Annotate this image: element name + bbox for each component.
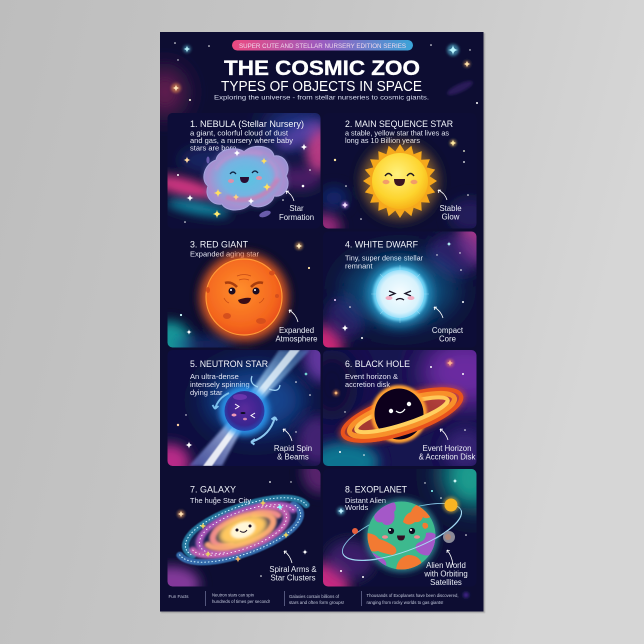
footer: fun facts: Galaxies contain billions of bbox=[289, 594, 340, 599]
callout: with Orbiting bbox=[423, 570, 468, 578]
heading: 4. WHITE DWARF bbox=[345, 240, 418, 250]
description: Worlds bbox=[345, 503, 368, 512]
description: intensely spinning bbox=[190, 380, 250, 389]
panel: red giant bbox=[168, 240, 318, 350]
arrow bbox=[447, 550, 453, 565]
icon: smiling sun bbox=[362, 143, 438, 219]
beams bbox=[189, 350, 310, 466]
callout: Stable bbox=[439, 204, 462, 213]
footer: fun facts: Neutron stars can spin bbox=[212, 592, 254, 598]
arrow bbox=[440, 429, 448, 440]
description: Event horizon & bbox=[345, 372, 398, 381]
description: Tiny, super dense stellar bbox=[345, 254, 423, 262]
description: dying star bbox=[190, 388, 223, 397]
title: THE COSMIC ZOO bbox=[224, 57, 420, 80]
icon: neutron star bbox=[212, 376, 280, 444]
footer: fun facts: stars and often form groups! bbox=[289, 600, 344, 605]
icon: spiral galaxy bbox=[171, 485, 315, 575]
series pill bbox=[232, 40, 413, 50]
panel: nebula bbox=[168, 113, 320, 226]
description: The huge Star City bbox=[190, 496, 251, 505]
icon: red giant bbox=[200, 253, 288, 341]
callout bbox=[440, 205, 462, 220]
description: a stable, yellow star that lives as bbox=[345, 128, 449, 138]
description: long as 10 Billion years bbox=[345, 136, 420, 145]
description: accretion disk bbox=[345, 380, 390, 389]
galaxy face and star clusters bbox=[200, 500, 290, 562]
footer: fun facts: hundreds of times per second! bbox=[212, 599, 270, 604]
arrow bbox=[289, 310, 298, 322]
callout: Star bbox=[289, 204, 304, 213]
callout bbox=[274, 445, 312, 460]
callout: Rapid Spin bbox=[274, 444, 312, 453]
callout bbox=[275, 326, 318, 344]
panel: galaxy bbox=[144, 450, 338, 602]
panel: black hole bbox=[323, 350, 476, 466]
callout: Formation bbox=[279, 213, 314, 222]
description: Distant Alien bbox=[345, 496, 386, 505]
callout: & Accretion Disk bbox=[419, 452, 475, 462]
icon: exoplanet bbox=[336, 492, 468, 572]
subtitle: TYPES OF OBJECTS IN SPACE bbox=[221, 78, 422, 95]
icon: white dwarf bbox=[368, 262, 432, 326]
icon: black hole bbox=[333, 375, 471, 455]
callout: Core bbox=[439, 334, 456, 344]
panel: exoplanet bbox=[301, 441, 512, 607]
footer: fun facts bbox=[168, 591, 469, 606]
description bbox=[345, 130, 449, 144]
callout bbox=[419, 444, 475, 462]
series pill: SUPER CUTE AND STELLAR NURSERY EDITION SERIES bbox=[239, 43, 407, 50]
header nebula glow bbox=[145, 42, 478, 116]
poster bbox=[160, 32, 484, 612]
heading: 5. NEUTRON STAR bbox=[190, 359, 268, 370]
callout: Glow bbox=[442, 212, 460, 222]
heading: 3. RED GIANT bbox=[190, 240, 248, 250]
heading: 8. EXOPLANET bbox=[345, 484, 407, 496]
description: stars are born bbox=[190, 144, 236, 152]
arrow bbox=[284, 551, 292, 563]
description bbox=[190, 372, 250, 397]
description bbox=[345, 496, 386, 512]
footer: fun facts: Thousands of Exoplanets have been discovered, bbox=[366, 593, 458, 598]
panel: main sequence star bbox=[323, 120, 476, 229]
heading: 1. NEBULA (Stellar Nursery) bbox=[190, 119, 304, 130]
description bbox=[345, 255, 423, 268]
callout: Star Clusters bbox=[270, 574, 316, 582]
callout bbox=[269, 565, 317, 582]
callout: Alien World bbox=[426, 561, 466, 570]
callout: Expanded bbox=[279, 326, 314, 335]
description: remnant bbox=[345, 262, 373, 270]
heading: 2. MAIN SEQUENCE STAR bbox=[345, 119, 453, 130]
footer: fun facts: ranging from rocky worlds to gas giants! bbox=[366, 600, 444, 605]
callout: Atmosphere bbox=[275, 334, 318, 344]
callout: Compact bbox=[432, 326, 464, 335]
callout: Spiral Arms & bbox=[269, 565, 317, 574]
callout: & Beams bbox=[277, 452, 309, 462]
description: Expanded aging star bbox=[190, 250, 259, 258]
arrow bbox=[434, 307, 443, 318]
description bbox=[190, 130, 293, 150]
heading: 6. BLACK HOLE bbox=[345, 359, 410, 370]
callout bbox=[280, 205, 314, 220]
callout: Event Horizon bbox=[423, 444, 471, 453]
arrow bbox=[438, 190, 447, 200]
panel: white dwarf bbox=[323, 232, 476, 348]
callout bbox=[423, 561, 468, 587]
icon: nebula cloud bbox=[204, 146, 288, 219]
panel: neutron star bbox=[168, 350, 320, 466]
description: and gas, a nursery where baby bbox=[190, 136, 293, 145]
tagline: Exploring the universe - from stellar nurseries to cosmic giants. bbox=[214, 94, 429, 102]
arrow bbox=[286, 191, 294, 201]
description: An ultra-dense bbox=[190, 372, 239, 381]
description: a giant, colorful cloud of dust bbox=[190, 128, 289, 138]
arrow bbox=[283, 429, 292, 441]
heading: 7. GALAXY bbox=[190, 484, 237, 496]
callout bbox=[432, 327, 463, 342]
poster shadow bbox=[161, 33, 485, 613]
footer: fun facts: Fun Facts bbox=[168, 594, 189, 599]
callout: Satellites bbox=[430, 578, 462, 587]
description bbox=[345, 374, 398, 387]
